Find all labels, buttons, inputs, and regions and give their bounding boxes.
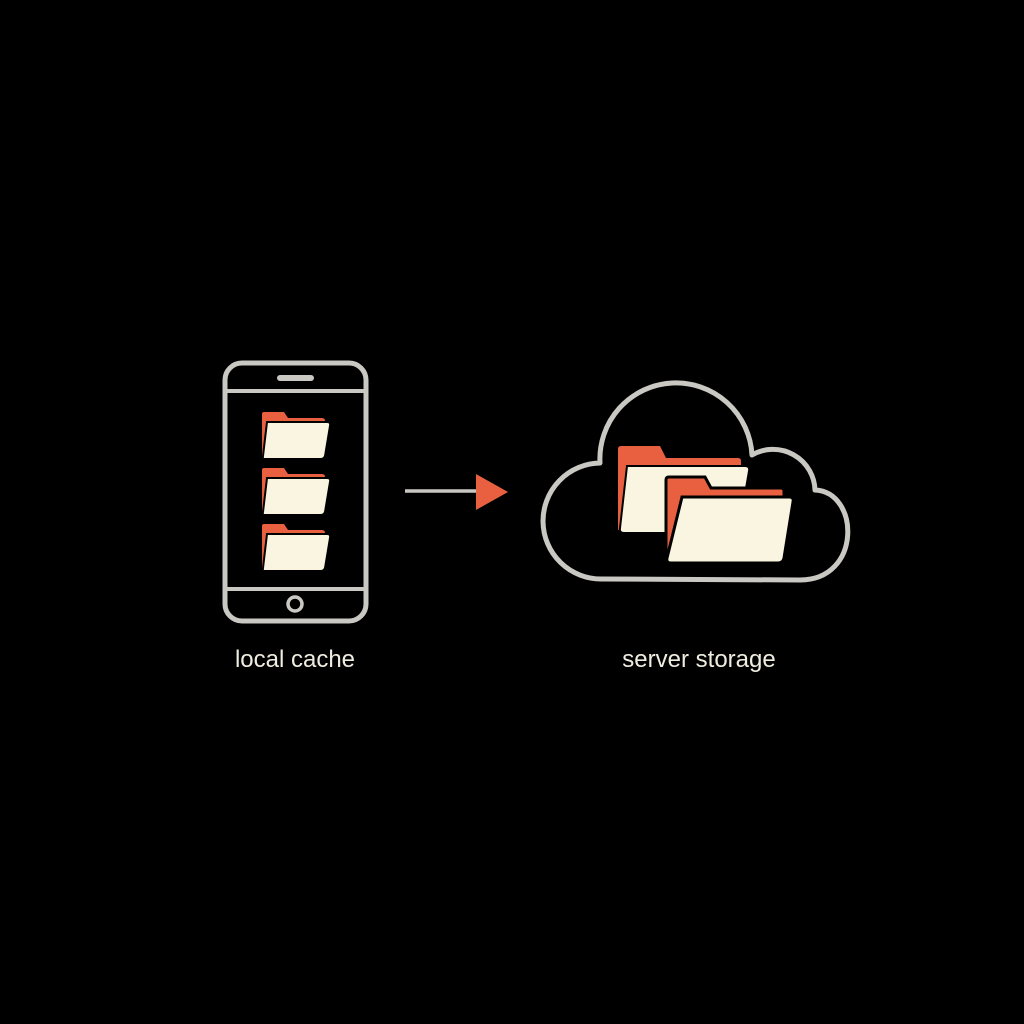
icon: phone	[225, 363, 366, 621]
folders in cloud	[618, 446, 793, 563]
label: server storage: server storage	[622, 646, 776, 673]
label: local cache: local cache	[235, 646, 355, 673]
folders in phone	[262, 412, 330, 571]
icon: cloud	[543, 383, 848, 580]
arrow	[405, 474, 508, 510]
